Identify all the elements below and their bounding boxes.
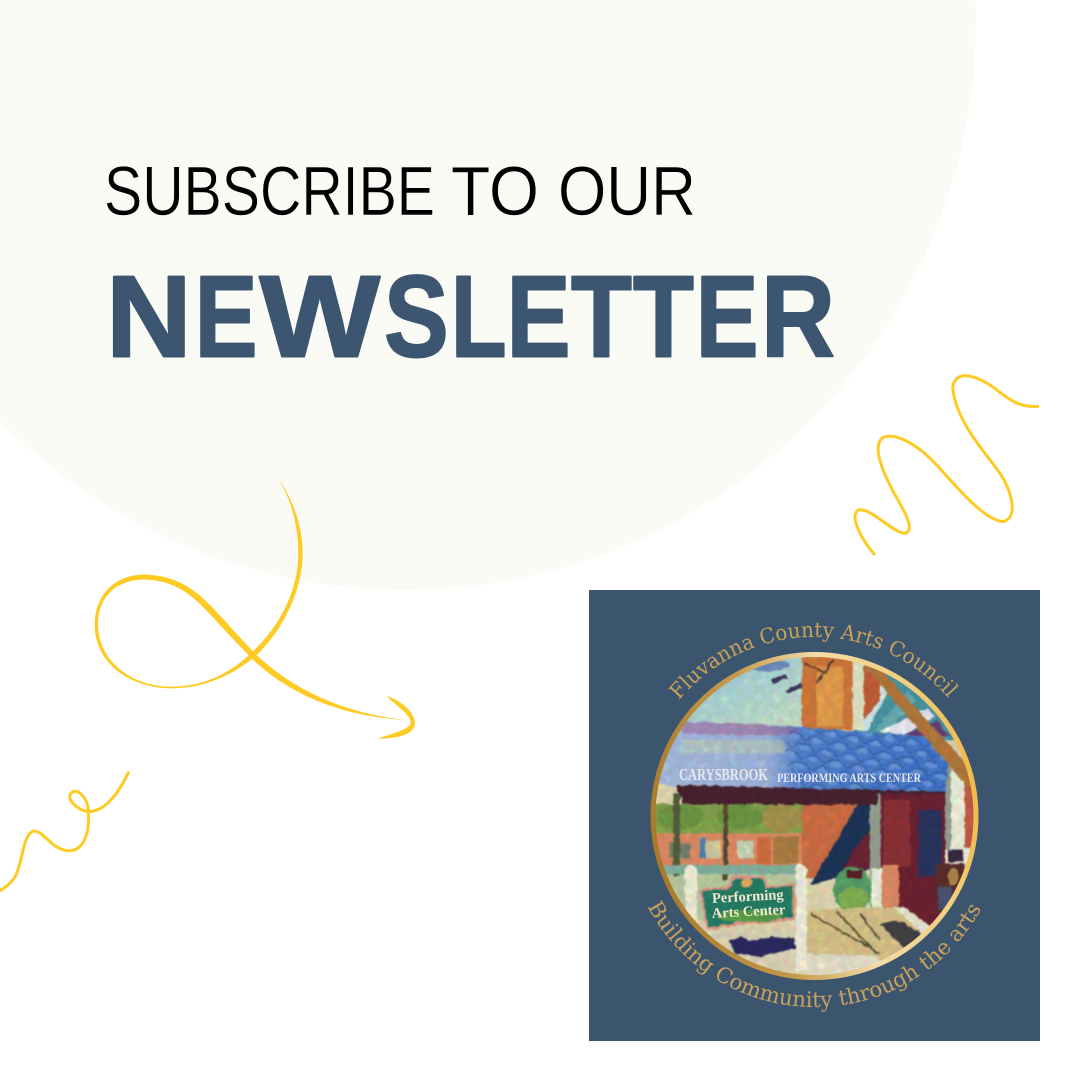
heading: subscribe to our: TO: [451, 152, 539, 230]
logo background: [589, 590, 1040, 1041]
heading: subscribe to our: [104, 152, 696, 230]
painted monument sign text: Arts Center: [711, 902, 786, 922]
panel: arts council logo: [589, 590, 1040, 1041]
heading: newsletter: W: [259, 252, 381, 382]
heading: subscribe to our: SUBSCRIBE: [104, 152, 435, 230]
heading: subscribe to our: OUR: [558, 152, 696, 230]
heading: newsletter: E: [195, 252, 257, 382]
heading: newsletter: L: [451, 252, 507, 382]
arrow shaft: [95, 477, 405, 720]
heading: newsletter: S: [384, 252, 449, 382]
curved title: Fluvanna County Arts Council: [668, 622, 959, 700]
background circle: [0, 0, 976, 590]
circular painting of the performing arts center: [656, 657, 974, 975]
heading: newsletter: T: [571, 252, 632, 382]
squiggle: right: [855, 376, 1038, 554]
gold ring: [653, 654, 976, 978]
heading: newsletter: R: [761, 252, 835, 382]
heading: newsletter: N: [106, 252, 192, 382]
painted building sign text: PERFORMING ARTS CENTER: [777, 771, 922, 785]
arrow head: [378, 696, 415, 739]
heading: newsletter: E: [507, 252, 570, 382]
painted building sign text: [679, 765, 922, 785]
painted monument sign text: Performing: [712, 887, 785, 907]
curved tagline: Building Community through the arts: [648, 900, 980, 1012]
heading: newsletter: E: [696, 252, 758, 382]
arrow: looping yellow arrow: [95, 477, 415, 739]
squiggle: left: [0, 773, 128, 891]
heading: newsletter: T: [633, 252, 694, 382]
painted building sign text: CARYSBROOK: [679, 765, 769, 784]
